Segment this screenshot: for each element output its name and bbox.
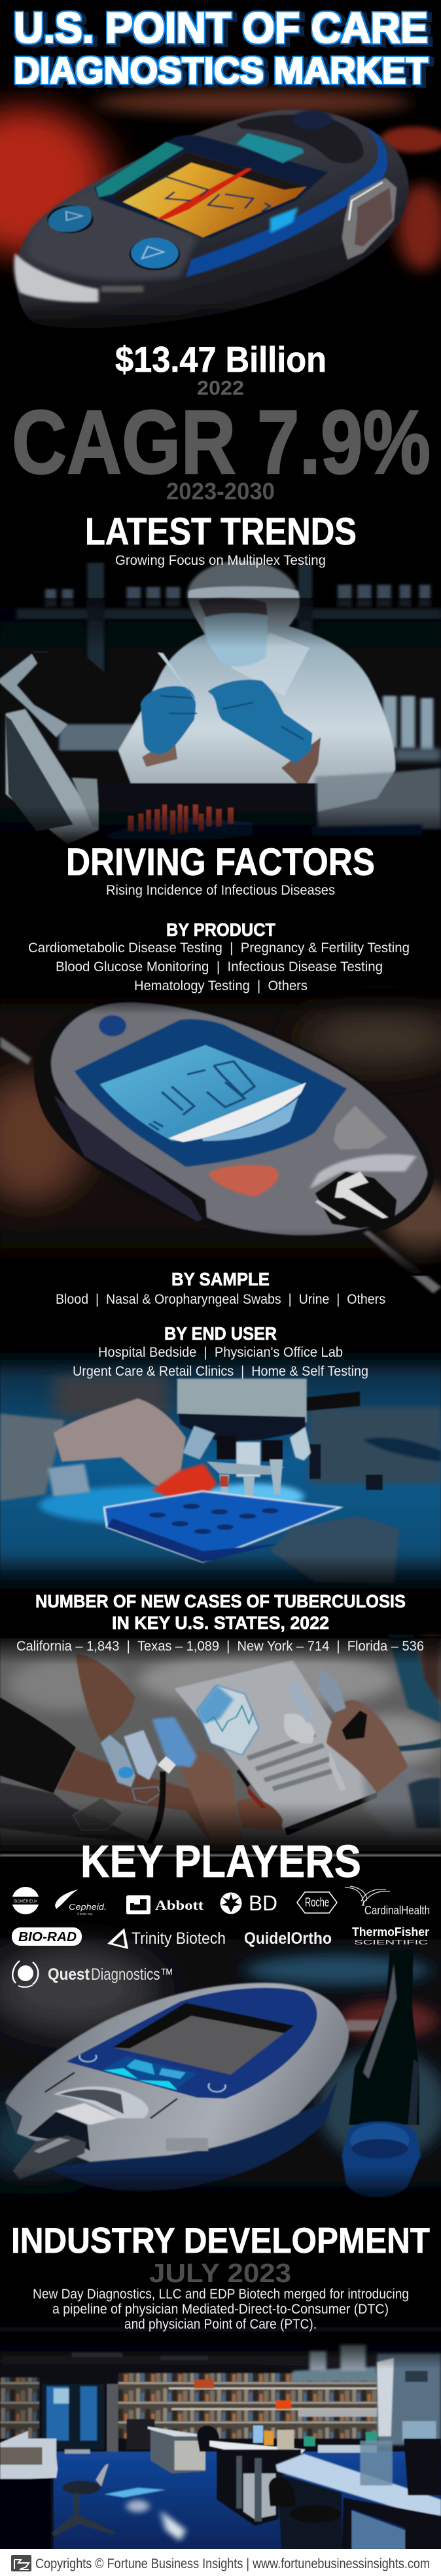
lab technician image [0, 561, 441, 846]
logo: Trinity Biotech [107, 1928, 226, 1949]
logo: BD [220, 1891, 277, 1915]
logo: Cepheid: Cepheid. [69, 1902, 107, 1912]
hero image: glucose meter with orange display [0, 90, 441, 338]
title [14, 3, 428, 92]
by sample heading: BY SAMPLE [171, 1269, 270, 1289]
tuberculosis state figures: California – 1,843 | Texas – 1,089 | New York – 714 | Florida – 536 [16, 1639, 424, 1654]
by end user list [73, 1345, 368, 1379]
key players heading: KEY PLAYERS [80, 1836, 361, 1887]
CAGR period: 2023-2030 [166, 478, 275, 505]
logo: Cardinal Health [345, 1886, 430, 1917]
by end user heading: BY END USER [164, 1323, 277, 1344]
by end user list: Hospital Bedside | Physician's Office Lab [98, 1345, 343, 1360]
logo: Trinity Biotech: Trinity Biotech [132, 1929, 226, 1948]
by product list: Cardiometabolic Disease Testing | Pregnancy & Fertility Testing [28, 940, 410, 956]
logo: Roche: Roche [305, 1896, 329, 1910]
industry development text: a pipeline of physician Mediated-Direct-to-Consumer (DTC) [52, 2302, 389, 2317]
tuberculosis heading: NUMBER OF NEW CASES OF TUBERCULOSIS [35, 1591, 406, 1611]
driving factors text: Rising Incidence of Infectious Diseases [106, 883, 335, 898]
logo: Abbott: Abbott [155, 1897, 203, 1913]
microscope image [0, 1350, 441, 1595]
glucose meter image with blue display [0, 988, 441, 1294]
by end user list: Urgent Care & Retail Clinics | Home & Self Testing [73, 1364, 368, 1379]
logo: Cepheid: A better way. [77, 1912, 93, 1916]
logo: Cepheid [55, 1889, 107, 1916]
logo: Bio-Rad [12, 1927, 82, 1946]
title: DIAGNOSTICS MARKET [14, 50, 428, 92]
by product heading: BY PRODUCT [166, 920, 275, 940]
market size value: $13.47 Billion [115, 339, 326, 380]
blood analyzer image [0, 1939, 441, 2210]
logo: Thermo Fisher Scientific: SCIENTIFIC [354, 1939, 428, 1946]
title: U.S. POINT OF CARE [14, 3, 428, 52]
logo: Quest Diagnostics: Diagnostics™ [91, 1965, 173, 1984]
latest trends heading: LATEST TRENDS [85, 510, 357, 553]
logo: Quest Diagnostics [12, 1961, 173, 1987]
logo: Quest Diagnostics: Quest [48, 1965, 90, 1984]
industry development date: JULY 2023 [149, 2258, 291, 2288]
logo: Bio-Rad: BIO-RAD [18, 1930, 77, 1944]
logo: BD: BD [249, 1891, 277, 1915]
industry development text: and physician Point of Care (PTC). [124, 2317, 317, 2332]
logo: Abbott [126, 1895, 203, 1914]
by product list: Hematology Testing | Others [134, 978, 308, 993]
industry development text [33, 2287, 409, 2332]
by sample list: Blood | Nasal & Oropharyngeal Swabs | Urine | Others [56, 1292, 385, 1307]
icon: Fortune Business Insights logo [11, 2555, 31, 2571]
by product list: Blood Glucose Monitoring | Infectious Disease Testing [56, 959, 383, 975]
logo: Cardinal Health: CardinalHealth [364, 1904, 430, 1917]
market size year: 2022 [197, 376, 244, 399]
by product list [28, 940, 410, 993]
logo: Roche [297, 1892, 337, 1913]
tuberculosis heading [35, 1591, 406, 1633]
laboratory interior image [0, 2327, 441, 2549]
logo: bioMerieux [12, 1887, 39, 1914]
tuberculosis heading: IN KEY U.S. STATES, 2022 [112, 1613, 329, 1633]
logo: Thermo Fisher Scientific: ThermoFisher [352, 1925, 429, 1939]
latest trends text: Growing Focus on Multiplex Testing [115, 553, 326, 568]
doctor hands and clipboard image [0, 1636, 441, 1857]
footer bar [0, 2549, 441, 2576]
driving factors heading: DRIVING FACTORS [66, 841, 375, 884]
logo: bioMerieux: BIOMÉRIEUX [14, 1898, 38, 1904]
logo: Thermo Fisher Scientific [352, 1925, 429, 1946]
industry development text: New Day Diagnostics, LLC and EDP Biotech merged for introducing [33, 2287, 409, 2302]
logo: QuidelOrtho: QuidelOrtho [244, 1929, 332, 1948]
